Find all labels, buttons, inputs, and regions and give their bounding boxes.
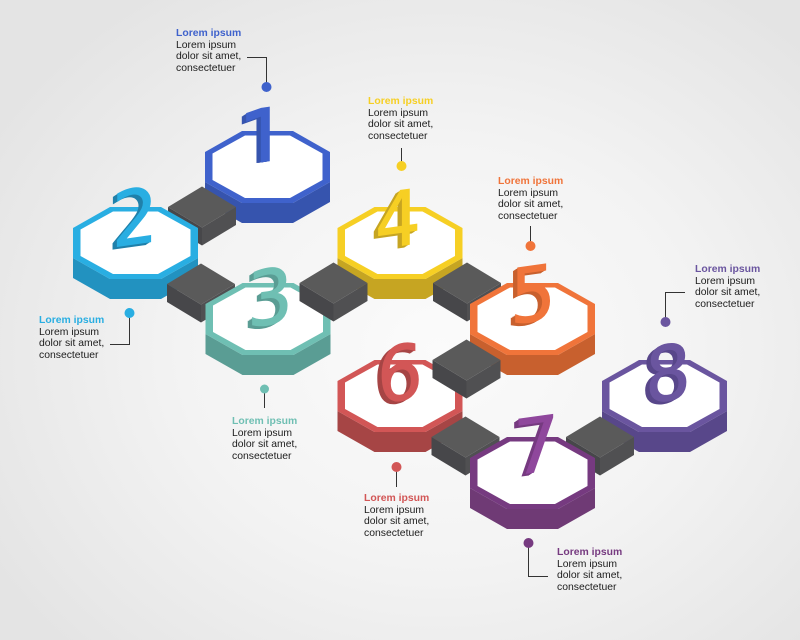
text block 8: Lorem ipsum (695, 264, 760, 275)
connector 2-3 (167, 264, 235, 322)
text block 7: Lorem ipsum (557, 547, 622, 558)
text block 2: Lorem ipsum (39, 315, 104, 326)
text block 1: consectetuer (176, 63, 236, 74)
text block 3: Lorem ipsum (232, 416, 297, 427)
text block 1: Lorem ipsum (176, 28, 241, 39)
number 7: 7 (513, 398, 558, 493)
text block 1: Lorem ipsum (176, 40, 236, 51)
text block 2: dolor sit amet, (39, 338, 104, 349)
text block 5 (498, 176, 563, 222)
leader 4 (396, 148, 406, 171)
number 4: 4 (375, 172, 420, 267)
number 5: 5 (510, 247, 556, 342)
leader 7 (524, 538, 548, 576)
text block 7: dolor sit amet, (557, 570, 622, 581)
leader 1 (247, 58, 272, 92)
text block 7: Lorem ipsum (557, 559, 617, 570)
text block 6: consectetuer (364, 528, 424, 539)
octagon 7 (470, 437, 595, 529)
connector 3-4 (300, 262, 368, 322)
text block 3: Lorem ipsum (232, 428, 292, 439)
octagon 5 (470, 283, 595, 375)
leader 3 (260, 384, 269, 408)
text block 4: dolor sit amet, (368, 119, 433, 130)
leader 8 (660, 292, 685, 327)
octagon 3 (206, 283, 330, 375)
connector 4-5 (433, 262, 501, 322)
number 6: 6 (377, 326, 422, 421)
leader 5 (526, 226, 536, 251)
text block 1 (176, 28, 241, 74)
connector 7-8 (566, 416, 634, 476)
text block 7: consectetuer (557, 582, 616, 593)
octagon 2 (73, 207, 198, 299)
text block 6: dolor sit amet, (364, 516, 429, 527)
connector 5-6 (432, 340, 500, 398)
connector 6-7 (432, 416, 500, 476)
text block 4 (368, 96, 433, 142)
text block 2: Lorem ipsum (39, 327, 99, 338)
text block 6: Lorem ipsum (364, 493, 429, 504)
text block 8: consectetuer (695, 299, 754, 310)
text block 5: Lorem ipsum (498, 176, 563, 187)
connector 1-2 (168, 186, 236, 246)
number 3: 3 (247, 250, 293, 345)
text block 1: dolor sit amet, (176, 51, 241, 62)
text block 8: Lorem ipsum (695, 276, 755, 287)
text block 5: dolor sit amet, (498, 199, 563, 210)
text block 5: Lorem ipsum (498, 188, 558, 199)
octagon 8 (602, 360, 727, 452)
number 1: 1 (237, 86, 291, 197)
text block 3: consectetuer (232, 451, 292, 462)
text block 3: dolor sit amet, (232, 439, 297, 450)
text block 6: Lorem ipsum (364, 505, 424, 516)
text block 4: Lorem ipsum (368, 96, 433, 107)
text block 4: consectetuer (368, 131, 428, 142)
text block 8 (695, 264, 760, 310)
text block 5: consectetuer (498, 211, 558, 222)
text block 4: Lorem ipsum (368, 108, 428, 119)
text block 2 (39, 315, 104, 361)
text block 6 (364, 493, 429, 539)
number 2: 2 (112, 170, 158, 265)
text block 8: dolor sit amet, (695, 287, 760, 298)
text block 3 (232, 416, 297, 462)
octagon 4 (338, 207, 462, 299)
text block 2: consectetuer (39, 350, 98, 361)
text block 7 (557, 547, 622, 593)
octagon 6 (338, 360, 462, 452)
leader 6 (392, 462, 402, 487)
number 8: 8 (645, 326, 690, 421)
leader 2 (110, 308, 134, 344)
octagon 1 (205, 131, 330, 223)
